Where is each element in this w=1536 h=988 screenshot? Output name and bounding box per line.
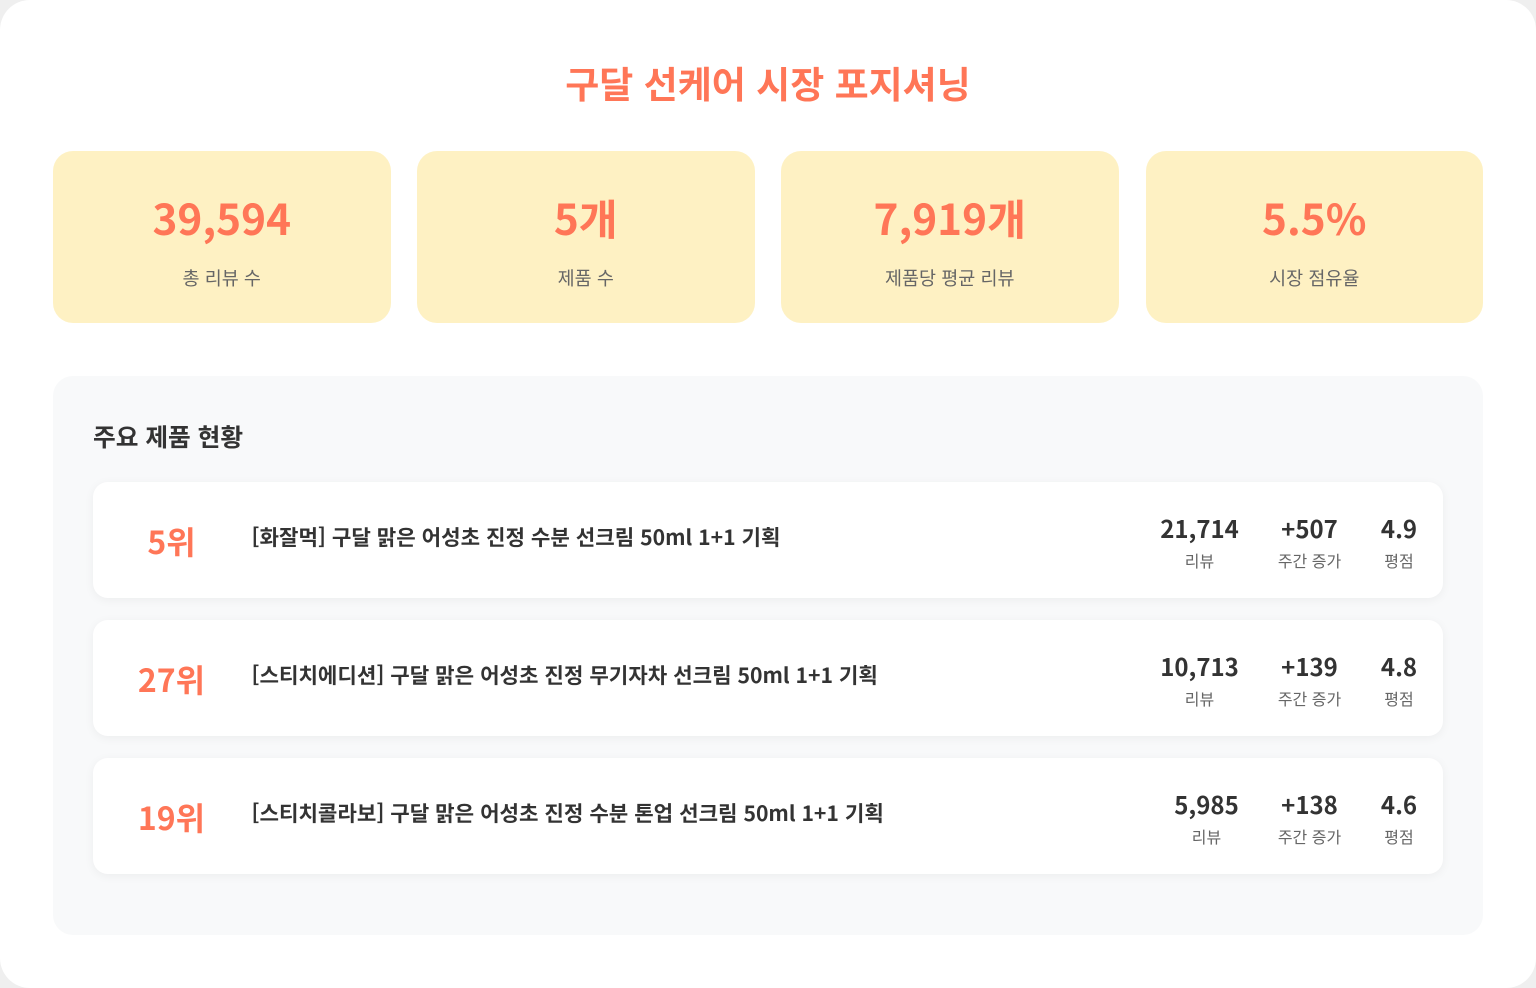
reviews value: 21,714 <box>1160 510 1239 545</box>
label: 시장 점유율 <box>1269 265 1359 291</box>
weekly increase value: +139 <box>1281 648 1338 683</box>
weekly increase value: +507 <box>1281 510 1338 545</box>
rank: 27위 <box>138 656 205 702</box>
reviews label: 리뷰 <box>1185 548 1214 572</box>
rating label: 평점 <box>1384 686 1414 710</box>
value: 7,919개 <box>873 186 1026 248</box>
value: 5.5% <box>1262 186 1366 248</box>
rating value: 4.6 <box>1381 786 1417 821</box>
weekly increase label: 주간 증가 <box>1278 686 1341 710</box>
rating label: 평점 <box>1384 548 1414 572</box>
stat card: market share <box>1146 151 1483 323</box>
reviews label: 리뷰 <box>1185 686 1214 710</box>
product name: [화잘먹] 구달 맑은 어성초 진정 수분 선크림 50ml 1+1 기획 <box>252 521 780 552</box>
product name: [스티치콜라보] 구달 맑은 어성초 진정 수분 톤업 선크림 50ml 1+1 기획 <box>252 797 884 828</box>
rating value: 4.9 <box>1381 510 1417 545</box>
rank: 5위 <box>147 518 196 564</box>
panel: key products <box>53 376 1483 935</box>
value: 5개 <box>554 186 618 248</box>
label: 제품 수 <box>558 265 614 291</box>
reviews value: 10,713 <box>1160 648 1239 683</box>
title: 구달 선케어 시장 포지셔닝 <box>565 55 971 109</box>
weekly increase label: 주간 증가 <box>1278 824 1341 848</box>
stat card: product count <box>417 151 754 323</box>
rank: 19위 <box>138 794 205 840</box>
label: 총 리뷰 수 <box>183 265 261 291</box>
product name: [스티치에디션] 구달 맑은 어성초 진정 무기자차 선크림 50ml 1+1 기획 <box>252 659 878 690</box>
stat card: total reviews <box>53 151 390 323</box>
weekly increase label: 주간 증가 <box>1278 548 1341 572</box>
product row 1 <box>93 482 1443 598</box>
panel heading: 주요 제품 현황 <box>93 418 243 454</box>
rating label: 평점 <box>1384 824 1414 848</box>
product row 3 <box>93 758 1443 874</box>
weekly increase value: +138 <box>1281 786 1338 821</box>
reviews value: 5,985 <box>1174 786 1239 821</box>
stat card: average reviews per product <box>781 151 1118 323</box>
product row 2 <box>93 620 1443 736</box>
rating value: 4.8 <box>1381 648 1417 683</box>
value: 39,594 <box>152 186 291 248</box>
label: 제품당 평균 리뷰 <box>885 265 1014 291</box>
reviews label: 리뷰 <box>1192 824 1221 848</box>
